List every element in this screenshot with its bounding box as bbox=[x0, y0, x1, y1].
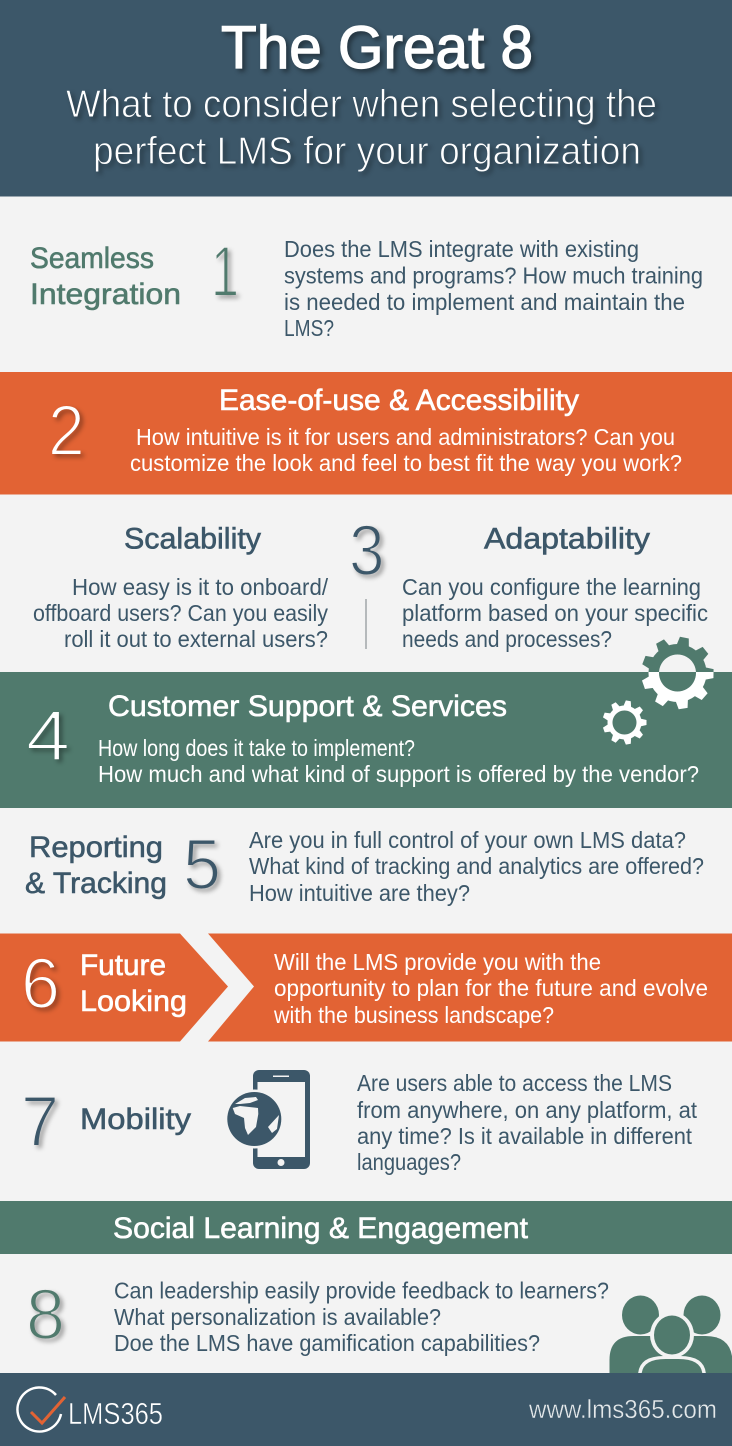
description adaptability bbox=[402, 574, 708, 652]
icon: small gear bbox=[602, 700, 646, 745]
number 3: 3 bbox=[349, 512, 384, 591]
description 7: any time? Is it available in different bbox=[357, 1123, 692, 1149]
footer panel bbox=[0, 1373, 732, 1446]
heading: social learning: Social Learning & Engagement bbox=[113, 1212, 529, 1245]
heading: scalability: Scalability bbox=[124, 522, 261, 556]
description 6 bbox=[273, 949, 708, 1028]
panel: 7 mobility bbox=[21, 1070, 697, 1175]
panel: 1 seamless integration bbox=[30, 233, 703, 341]
heading: ease-of-use: Ease-of-use & Accessibility bbox=[219, 384, 579, 417]
description 8: Doe the LMS have gamification capabilities? bbox=[114, 1330, 540, 1356]
description adaptability: Can you configure the learning bbox=[402, 574, 701, 600]
panel: 2 ease of use bbox=[0, 372, 732, 494]
logo: LMS365: LMS365 bbox=[68, 1396, 163, 1431]
heading: mobility: Mobility bbox=[80, 1103, 191, 1136]
description 5: How intuitive are they? bbox=[249, 880, 470, 906]
subtitle: perfect LMS for your organization bbox=[93, 130, 641, 173]
heading: seamless integration: Seamless bbox=[30, 242, 154, 275]
heading: reporting and tracking: Reporting bbox=[29, 831, 163, 864]
icon: people bbox=[610, 1296, 732, 1380]
description 6: with the business landscape? bbox=[273, 1002, 554, 1028]
description adaptability: needs and processes? bbox=[402, 626, 612, 652]
description scalability: offboard users? Can you easily bbox=[33, 600, 328, 626]
description 7: from anywhere, on any platform, at bbox=[357, 1097, 697, 1123]
arrow: left chevron bbox=[0, 934, 228, 1042]
website url: www.lms365.com bbox=[528, 1394, 717, 1424]
description 6: opportunity to plan for the future and evolve bbox=[274, 975, 708, 1001]
description 5: Are you in full control of your own LMS data? bbox=[249, 827, 686, 853]
description 1 bbox=[284, 236, 703, 341]
heading: adaptability: Adaptability bbox=[484, 522, 650, 556]
description 4: How much and what kind of support is offered by the vendor? bbox=[98, 761, 699, 787]
description 1: LMS? bbox=[284, 315, 334, 341]
arrow: right chevron bbox=[208, 934, 732, 1042]
subtitle: What to consider when selecting the bbox=[66, 83, 657, 126]
heading: customer support: Customer Support & Services bbox=[108, 690, 507, 723]
number 7: 7 bbox=[21, 1083, 59, 1162]
panel: 5 reporting and tracking bbox=[25, 826, 704, 906]
subtitle bbox=[66, 83, 657, 173]
icon: phone with globe bbox=[225, 1070, 310, 1169]
description scalability: roll it out to external users? bbox=[64, 626, 328, 652]
panel: 6 future looking bbox=[0, 934, 732, 1042]
panel: 8 social learning bbox=[0, 1201, 732, 1380]
heading: reporting and tracking bbox=[25, 831, 167, 900]
number 5: 5 bbox=[183, 826, 221, 905]
description adaptability: platform based on your specific bbox=[402, 600, 708, 626]
description scalability: How easy is it to onboard/ bbox=[72, 574, 328, 600]
heading: future looking: Looking bbox=[80, 985, 187, 1018]
description 4: How long does it take to implement? bbox=[98, 735, 415, 761]
description scalability bbox=[33, 574, 328, 652]
number 6: 6 bbox=[21, 945, 60, 1024]
number 4: 4 bbox=[26, 697, 70, 776]
description 8: Can leadership easily provide feedback to learners? bbox=[114, 1278, 609, 1304]
panel: 4 customer support bbox=[0, 636, 732, 808]
number 1: 1 bbox=[211, 233, 239, 312]
description 8 bbox=[114, 1278, 609, 1356]
title: The Great 8 bbox=[221, 14, 533, 81]
description 1: Does the LMS integrate with existing bbox=[284, 236, 639, 262]
description 7 bbox=[357, 1070, 697, 1175]
description 7: languages? bbox=[357, 1149, 461, 1175]
description 6: Will the LMS provide you with the bbox=[274, 949, 601, 975]
header panel bbox=[0, 0, 732, 196]
description 2 bbox=[130, 424, 682, 476]
description 1: is needed to implement and maintain the bbox=[284, 289, 685, 315]
heading: seamless integration: Integration bbox=[30, 278, 181, 311]
logo: LMS365 bbox=[17, 1388, 163, 1432]
description 5 bbox=[249, 827, 704, 906]
description 7: Are users able to access the LMS bbox=[357, 1070, 672, 1096]
description 1: systems and programs? How much training bbox=[284, 262, 703, 288]
heading: future looking bbox=[80, 949, 187, 1018]
heading: seamless integration bbox=[30, 242, 181, 311]
icon: large gear bbox=[641, 636, 714, 710]
number 2: 2 bbox=[48, 392, 85, 471]
description 5: What kind of tracking and analytics are offered? bbox=[249, 853, 704, 879]
description 2: How intuitive is it for users and administrators? Can you bbox=[136, 424, 675, 450]
heading: reporting and tracking: & Tracking bbox=[25, 867, 167, 900]
description 2: customize the look and feel to best fit the way you work? bbox=[130, 450, 682, 476]
description 8: What personalization is available? bbox=[114, 1304, 441, 1330]
panel: 3 scalability and adaptability bbox=[33, 512, 708, 652]
heading: future looking: Future bbox=[80, 949, 166, 982]
description 4 bbox=[98, 735, 699, 787]
number 8: 8 bbox=[26, 1276, 65, 1355]
